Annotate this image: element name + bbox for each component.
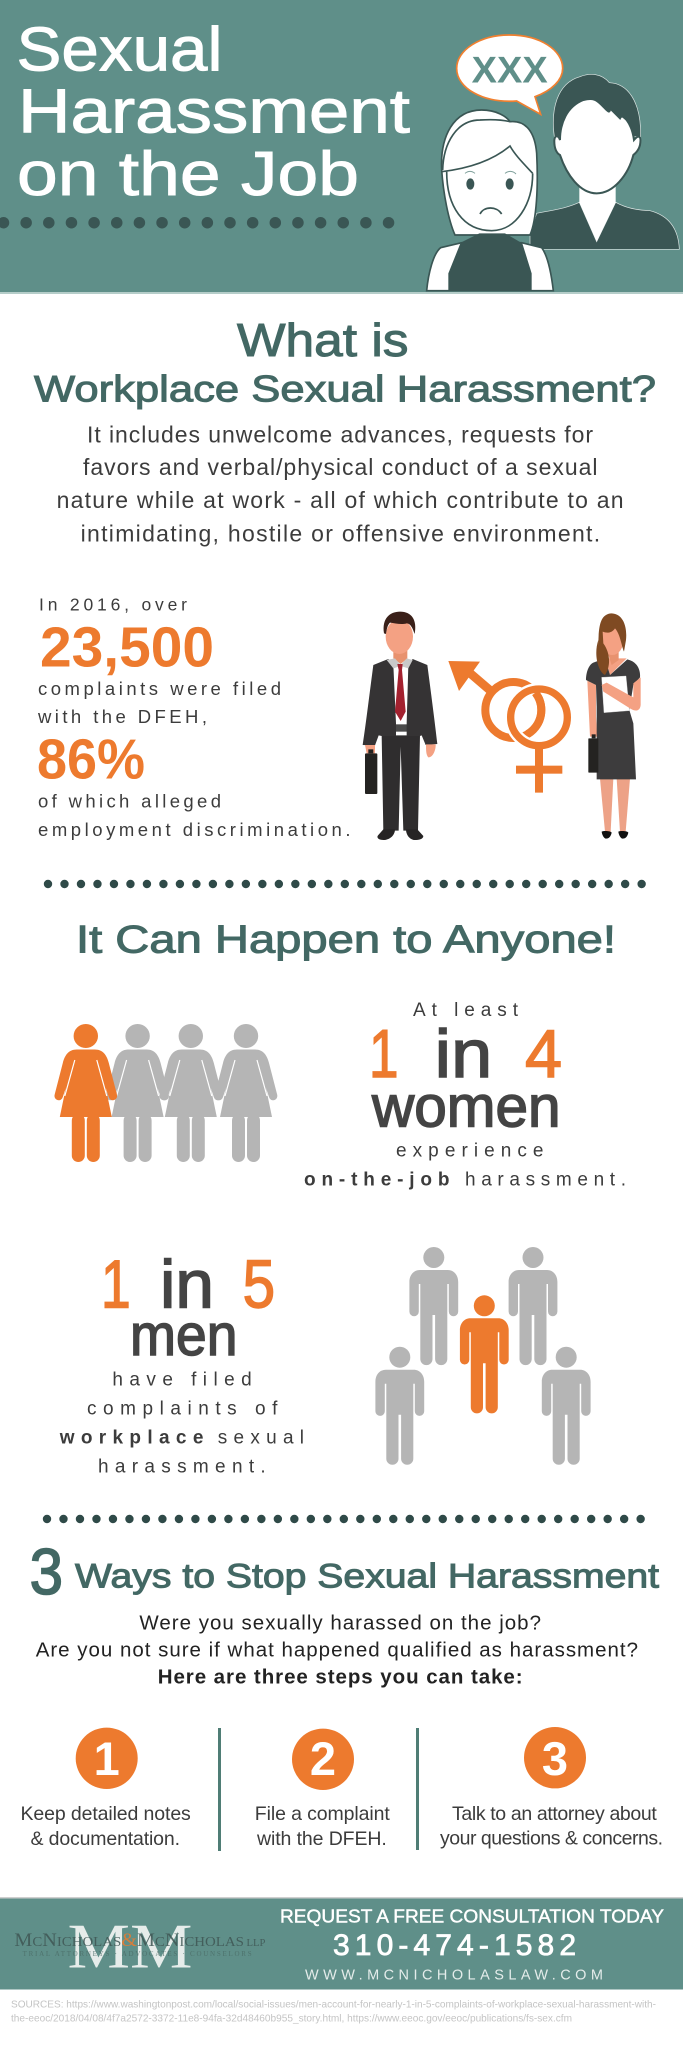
stat: 1 in 5 men: complaints of — [87, 1398, 278, 1419]
stat: 1 in 4 women: harassment. — [465, 1170, 626, 1191]
panel: complaint statistics: In 2016, over — [39, 595, 187, 615]
panel: footer call to action — [0, 1897, 683, 1990]
heading: what is workplace sexual harassment — [34, 314, 656, 410]
icon: man and woman with speech bubble — [427, 35, 679, 291]
stat: 1 in 4 women: experience — [396, 1141, 544, 1162]
title — [16, 16, 410, 209]
text: website: WWW.MCNICHOLASLAW.COM — [305, 1967, 603, 1983]
heading: it can happen to anyone: It Can Happen to Anyone! — [76, 919, 616, 962]
stat: 1 in 5 men: sexual — [218, 1427, 304, 1448]
stat: 1 in 5 men: harassment. — [98, 1457, 266, 1478]
stat: 1 in 5 men: in — [160, 1247, 214, 1323]
logo: McNicholas & McNicholas LLP: MM — [68, 1911, 192, 1982]
stat: 1 in 5 men: have filed — [112, 1370, 252, 1391]
icon: businessman — [363, 612, 437, 840]
text block: intro questions: Are you not sure if what happened qualified as harassment? — [36, 1639, 638, 1662]
step 1: Keep detailed notes — [20, 1803, 191, 1825]
title: on the Job — [17, 140, 359, 209]
logo: McNicholas & McNicholas LLP: TRIAL ATTORNEYS · ADVOCATES · COUNSELORS — [23, 1950, 252, 1958]
text block: intro questions: Here are three steps you can take: — [158, 1665, 523, 1688]
heading: 3 ways to stop sexual harassment: Ways to Stop Sexual Harassment — [75, 1558, 660, 1596]
icon: speech bubble: XXX — [472, 50, 548, 91]
step 3: 3 — [542, 1732, 568, 1785]
text block: definition — [57, 421, 624, 547]
panel: complaint statistics — [37, 595, 350, 840]
step 2: 2 — [310, 1732, 336, 1785]
heading: what is workplace sexual harassment: What is — [237, 314, 408, 366]
step 3: Talk to an attorney about — [452, 1803, 657, 1825]
stat: 1 in 5 men: 1 — [101, 1247, 131, 1323]
stat: 1 in 5 men: workplace — [59, 1427, 203, 1448]
icon: businesswoman — [586, 613, 641, 839]
stat: 1 in 4 women: 1 — [369, 1016, 398, 1092]
text: complaints filed: with the DFEH, — [37, 706, 207, 727]
text: phone number: 310-474-1582 — [333, 1929, 576, 1962]
number: 23,500: 23,500 — [40, 616, 214, 680]
step 3: your questions & concerns. — [440, 1827, 663, 1849]
stat: 1 in 4 women: on-the-job — [304, 1170, 450, 1191]
logo: McNicholas & McNicholas LLP: MCNICHOLAS&MCNICHOLAS LLP — [14, 1930, 266, 1951]
icon: group of five men, one highlighted — [375, 1247, 591, 1465]
stat: 1 in 5 men: 5 — [243, 1247, 275, 1323]
step 2 — [255, 1729, 390, 1850]
text block: definition: intimidating, hostile or offensive environment. — [81, 521, 600, 547]
text: complaints filed — [37, 678, 281, 727]
stat: 1 in 4 women: women — [371, 1075, 560, 1140]
stat: 1 in 4 women — [304, 1000, 626, 1191]
step 2: with the DFEH. — [256, 1828, 387, 1850]
text block: sources: the-eeoc/2018/04/08/4f7a2572-3372-11e8-94fa-32d48460b955_story.html, https://www.eeoc.gov/eeoc/publications/fs-sex.cfm — [11, 2013, 572, 2025]
text block: definition: It includes unwelcome advances, requests for — [87, 421, 593, 447]
logo: McNicholas & McNicholas LLP — [14, 1911, 266, 1982]
text block: definition: favors and verbal/physical conduct of a sexual — [83, 454, 598, 480]
icon: woman with sad face — [427, 110, 553, 291]
stat: 1 in 4 women: At least — [413, 1000, 519, 1021]
step 1: 1 — [94, 1732, 120, 1785]
step 1 — [20, 1728, 191, 1850]
panel: header — [0, 0, 683, 294]
number: 86%: 86% — [37, 728, 145, 792]
stat: 1 in 4 women: 4 — [525, 1016, 562, 1092]
icon: gender symbols — [448, 661, 567, 793]
text block: sources — [11, 1999, 656, 2025]
text: complaints filed: complaints were filed — [38, 678, 281, 699]
text: request a free consultation: REQUEST A FREE CONSULTATION TODAY — [280, 1907, 664, 1927]
heading: 3 ways to stop sexual harassment: 3 — [30, 1535, 63, 1608]
icon: row of four women, one highlighted — [54, 1024, 277, 1162]
step 3 — [440, 1727, 663, 1849]
text: employment discrimination — [38, 791, 350, 840]
text block: sources: SOURCES: https://www.washingtonpost.com/local/social-issues/men-account-for-nearly-1-in-5-complaints-of-workplace-sexual-harassment-with- — [11, 1999, 656, 2011]
heading: 3 ways to stop sexual harassment — [30, 1535, 660, 1608]
step 1: & documentation. — [30, 1828, 180, 1850]
heading: what is workplace sexual harassment: Workplace Sexual Harassment? — [34, 369, 656, 410]
icon: speech bubble — [457, 35, 563, 114]
title: Harassment — [18, 78, 410, 147]
text block: intro questions — [36, 1611, 638, 1688]
stat: 1 in 5 men — [59, 1247, 304, 1478]
text block: definition: nature while at work - all of which contribute to an — [57, 487, 624, 513]
stat: 1 in 5 men: men — [130, 1303, 237, 1368]
step 2: File a complaint — [255, 1803, 390, 1825]
text: employment discrimination: of which alleged — [38, 791, 221, 812]
stat: 1 in 4 women: in — [435, 1016, 492, 1092]
title: Sexual — [16, 16, 223, 85]
text: employment discrimination: employment discrimination. — [38, 819, 350, 840]
icon: man silhouette — [530, 74, 679, 249]
text block: intro questions: Were you sexually harassed on the job? — [139, 1611, 541, 1634]
